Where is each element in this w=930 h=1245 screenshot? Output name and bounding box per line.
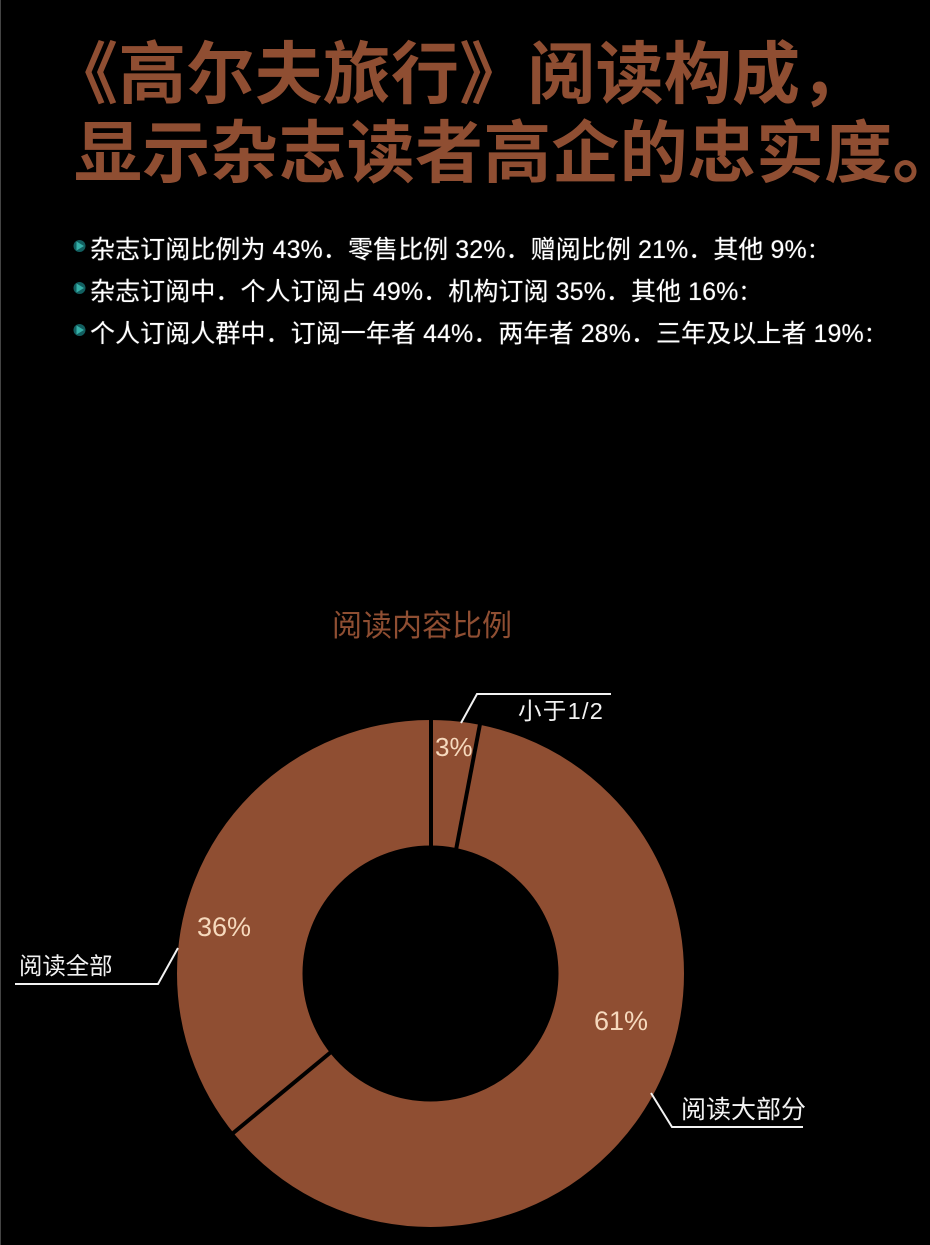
title: 《高尔夫旅行》阅读构成， (50, 37, 868, 113)
bullet text 1: 杂志订阅比例为 43%．零售比例 32%．赠阅比例 21%．其他 9%： (90, 233, 829, 265)
chart heading: 阅读内容比例 (332, 610, 512, 643)
title (50, 37, 930, 192)
leader: 小于1/2 (461, 694, 611, 723)
bullet icon 2 (74, 282, 86, 294)
bullet list (74, 233, 886, 349)
leader: 阅读大部分 (651, 1093, 803, 1127)
bullet text 2: 杂志订阅中．个人订阅占 49%．机构订阅 35%．其他 16%： (90, 275, 761, 307)
label: 小于1/2: 小于1/2 (518, 698, 604, 724)
label: 阅读全部: 阅读全部 (19, 953, 113, 979)
value: 3%: 3% (435, 732, 473, 762)
leader: 阅读全部 (15, 948, 178, 984)
value: 61%: 61% (594, 1006, 648, 1036)
bullet icon 1 (74, 240, 86, 252)
value: 36%: 36% (197, 912, 251, 942)
bullet text 3: 个人订阅人群中．订阅一年者 44%．两年者 28%．三年及以上者 19%： (90, 317, 886, 349)
label: 阅读大部分: 阅读大部分 (681, 1096, 806, 1124)
bullet icon 3 (74, 324, 86, 336)
donut ring (232, 718, 621, 1164)
